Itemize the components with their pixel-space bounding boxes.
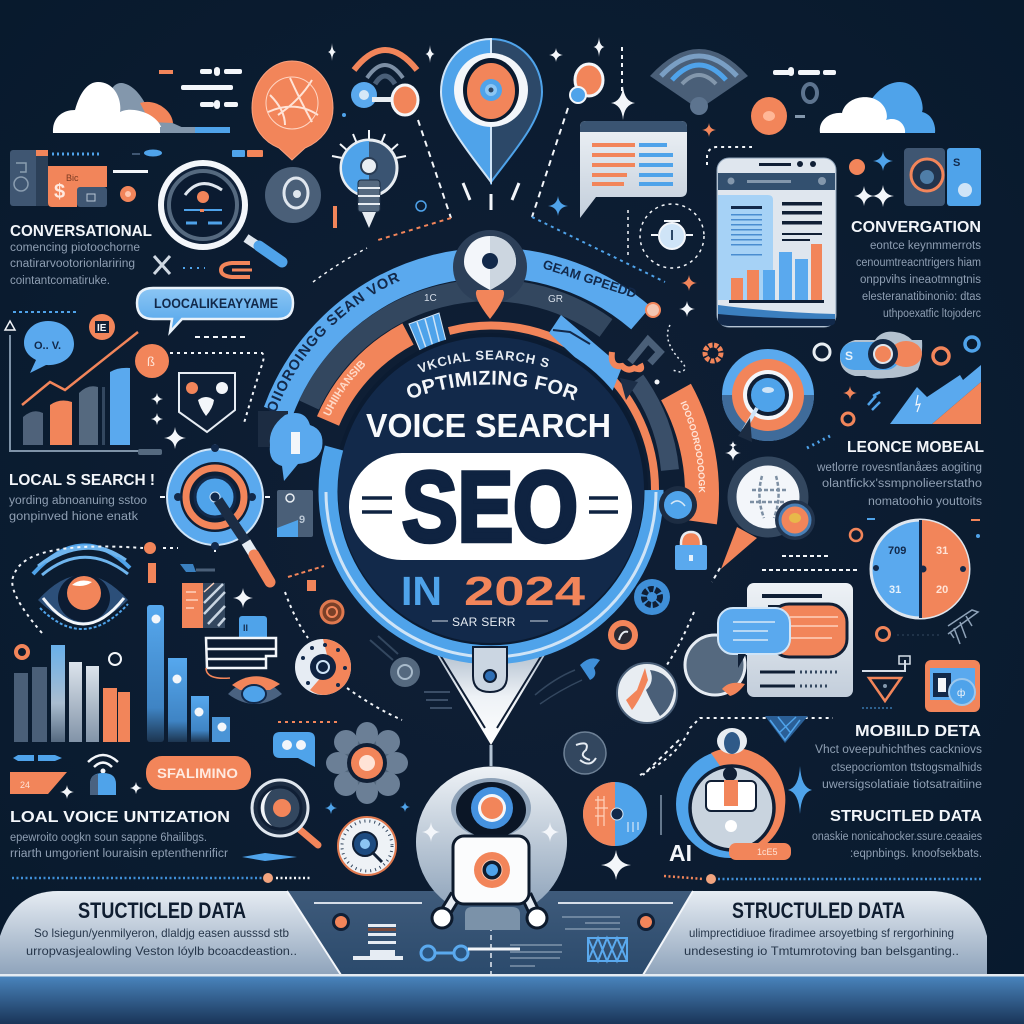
heading: convergation (851, 219, 981, 320)
panel: footer right: ulimprectidiuoe firadimee arsoyetbing sf rergorhining (689, 926, 954, 940)
panel: central pointer (419, 625, 563, 766)
ring text labels: GR (548, 294, 563, 305)
text: sar serr (432, 615, 548, 629)
icon: device card top left (10, 150, 263, 207)
icon: magnifying glass (161, 163, 282, 262)
icon: person with wifi (88, 755, 118, 795)
arc: blue ring (328, 448, 654, 655)
icon: top sparkles (328, 37, 635, 120)
arc: slate band (309, 290, 606, 405)
icon: target with pen (160, 444, 270, 582)
icons: right of ring marks (654, 275, 737, 449)
heading: leonce mobeal (816, 439, 984, 508)
icon: lock (675, 532, 707, 570)
icon: small magnifier (252, 780, 318, 845)
bubble: O.. V. (34, 340, 61, 352)
heading: local voice utilization: epewroito oogkn soun sappne 6hailibgs. (10, 832, 207, 844)
icon: left small row: 24 (20, 780, 30, 790)
icon: small squiggle circle (564, 732, 606, 774)
icon: half pie (583, 782, 647, 846)
panel: top arc bands (278, 263, 702, 522)
heading: leonce mobeal: wetlorre rovesntlanåæs aogiting (816, 462, 982, 474)
icon: right floating dashes and ball (751, 67, 836, 135)
icon: small blue sparkles and cog (342, 113, 716, 216)
icon: browser window with chart (717, 158, 836, 327)
heading: convergation: cenoumtreacntrigers hiam (856, 257, 981, 269)
icon: shield (179, 373, 235, 432)
text: in 2024: IN (401, 568, 442, 614)
panel: footer left (0, 891, 341, 975)
icon: grey circle with eye (265, 167, 321, 223)
text: in 2024: 2024 (464, 568, 585, 614)
icon: right node (637, 913, 655, 931)
icon: left sparkles (60, 185, 894, 880)
orange dot: ß (147, 354, 155, 369)
arc: slate band right (636, 380, 670, 470)
icon: rings and comb (850, 518, 980, 644)
footer band (0, 974, 1024, 1024)
icon: small grey square: 9 (299, 514, 305, 526)
icon: lined card with chip: ll (243, 623, 248, 633)
ring text labels: IOOGOOROOOOOGK (680, 400, 706, 493)
heading: conversational (10, 223, 152, 287)
icon: pill node cluster (814, 332, 979, 379)
ring text labels: IOIIOROINGG SEAN VOR (268, 272, 400, 411)
icon: top right card (849, 148, 981, 206)
icon: chain connector (421, 946, 520, 960)
icon: robot (416, 767, 567, 930)
heading: local search (9, 472, 155, 523)
icon: dotted stopwatch (640, 204, 704, 268)
icon: cloud bubble (258, 411, 322, 481)
icon: decorative small shapes under ring (370, 636, 600, 708)
heading: convergation: elesteranatibinonio: dtas (862, 291, 981, 303)
badge: IE (97, 323, 107, 334)
orange dot (135, 344, 169, 378)
heading: mobiild deta: MOBIILD DETA (855, 723, 981, 740)
heading: leonce mobeal: olantfickx'ssmpnolieerstatho (822, 478, 982, 490)
heading: convergation: eontce keynmmerrots (870, 240, 981, 252)
icon: small grey square (277, 490, 313, 537)
icon: bubble with two dots (273, 732, 315, 767)
panel: main badge circle (318, 337, 664, 693)
icon: small orange and blue capsule (570, 64, 603, 103)
pie chart: clock: 709 (888, 545, 906, 557)
arc: orange band left (328, 334, 408, 421)
connector: lower right dashed (640, 556, 858, 775)
text: optimizing for: OPTIMIZING FOR (407, 370, 578, 400)
panel: footer right: STRUCTULED DATA (732, 898, 905, 923)
icon: left cloud (53, 82, 230, 133)
icon: left small row (10, 755, 67, 794)
heading: convergation: CONVERGATION (851, 219, 981, 236)
icon: orange node (144, 542, 156, 554)
icon: eye (33, 545, 130, 629)
heading: conversational: CONVERSATIONAL (10, 223, 152, 240)
heading: mobiild deta: ctsepocriomton ttstogsmalhids (831, 762, 982, 774)
icon: pill node cluster: S (845, 349, 853, 363)
dividers: dotted lines (12, 873, 982, 884)
icon: signal arcs with nodes (351, 50, 418, 115)
heading: conversational: cointantcomatiruke. (10, 275, 110, 287)
icon: device card top left: $ (54, 181, 65, 203)
label: AI (661, 795, 692, 866)
icon: large location pin (441, 39, 542, 182)
pie chart: clock (871, 520, 969, 618)
heading: mobiild deta (815, 723, 982, 791)
icon: dial wheel (295, 639, 351, 695)
heading: mobiild deta: Vhct oveepuhichthes cackniovs (815, 744, 982, 756)
icon: right target (705, 345, 814, 442)
bar chart: grey and orange bars (14, 645, 130, 742)
icon: mountains chart (807, 365, 981, 448)
heading: mobiild deta: uwersigsolatiaie tiotsatraitiine (822, 779, 982, 791)
text: vkcial search: VKCIAL SEARCH S (417, 350, 549, 372)
icon: chain link (612, 340, 660, 370)
heading: convergation: uthpoexatfic ltojoderc (883, 308, 981, 320)
ring text labels: 1C (424, 293, 437, 304)
text: in 2024 (401, 568, 585, 614)
label pill: sfalimino: SFALIMINO (157, 765, 238, 781)
panel: footer right (643, 891, 987, 975)
ring text labels: UHIIHANSIB (323, 360, 365, 416)
icon: orange map bubble (252, 61, 333, 160)
icon: blue gear badge (608, 579, 670, 650)
icon: striped tile (409, 313, 447, 350)
bar chart: growth with trend line (5, 312, 169, 455)
arc: blue outer band (278, 263, 641, 412)
connectors: shield dotted path (170, 337, 264, 423)
icon: light bulb (332, 130, 406, 228)
heading: leonce mobeal: LEONCE MOBEAL (847, 439, 984, 456)
label pill: local keyword (137, 288, 293, 332)
icon: globe magnifier (721, 461, 815, 569)
heading: conversational: cnatirarvootorionlariring (10, 258, 135, 270)
connectors: top dashed lines (313, 47, 665, 282)
ring text labels (268, 257, 706, 493)
icon: orange and blue app tile: ф (957, 687, 965, 699)
label: AI: AI (669, 840, 692, 866)
icon: tiny blue sparkles (242, 802, 410, 861)
label pill: local keyword: LOOCALIKEAYYAME (154, 295, 278, 311)
heading: convergation: onppvihs ineaotmngtnis (860, 274, 981, 286)
badge (89, 314, 115, 340)
icon: browser speech panel (580, 121, 687, 218)
icon: lined card with chip (206, 616, 282, 704)
arc: orange banner right (676, 392, 702, 522)
icon: globe (617, 663, 677, 723)
heading: local search: yording abnoanuing sstoo (9, 495, 147, 507)
text: sar serr: SAR SERR (452, 615, 516, 629)
icon: dotted corner (707, 147, 752, 165)
heading: leonce mobeal: nomatoohio youttoits (868, 496, 982, 508)
heading: conversational: comencing piotoochorne (10, 242, 140, 254)
icon: cross and small orange mark (154, 256, 252, 277)
icon: small orange marker on arc (646, 303, 660, 317)
heading: local search: gonpinved hione enatk (9, 511, 138, 523)
panel: footer left: STUCTICLED DATA (78, 898, 246, 923)
icon: mesh triangle (765, 716, 808, 743)
ring text labels: GEAM GPEEDD (541, 257, 638, 301)
icon: avatar badge (676, 728, 812, 860)
heading: local search: LOCAL S SEARCH ! (9, 472, 155, 489)
heading: structiled data right: STRUCITLED DATA (830, 808, 982, 825)
icon: blue node on ring (659, 486, 697, 524)
heading: structiled data right (812, 808, 982, 860)
icon: avatar badge: 1cE5 (757, 847, 778, 857)
panel: footer right: undesesting io Tmtumrotoving ban belsganting.. (684, 944, 959, 958)
icon: blue card on arc (549, 315, 638, 400)
icon: flower gear (326, 722, 408, 804)
bar chart: blue bars (147, 563, 230, 742)
panel: footer left: So lsiegun/yenmilyeron, dlaldjg easen ausssd stb (34, 926, 289, 940)
arc: orange thin band (449, 326, 655, 490)
icon: triangle and small symbols (862, 656, 910, 708)
pie chart: clock: 31 (889, 584, 901, 596)
icon: dial magnifier (338, 817, 396, 875)
heading: structiled data right: :eqpnbings. knoofsekbats. (850, 848, 982, 860)
icon: server stack (353, 924, 403, 960)
icon: device card top left: Bic (66, 173, 79, 183)
icon: grey signal fan (650, 49, 748, 115)
pie chart: clock: 20 (936, 584, 948, 596)
icon: striped note card (182, 583, 225, 628)
heading: structiled data right: onaskie nonicahocker.ssure.ceaaies (812, 831, 982, 843)
icon: top right card: S (953, 157, 960, 169)
seo pill: SEO (402, 451, 578, 562)
panel: footer left: urropvasjealowling Veston lóylb bcoacdeastion.. (26, 944, 297, 958)
bubble (24, 321, 74, 373)
icon: chat card (685, 583, 853, 697)
icon: right cloud (820, 82, 935, 133)
icon: mesh (588, 938, 627, 961)
icon: orange swirl gear and marks (288, 566, 343, 623)
icon: pin rays (463, 183, 519, 210)
panel: footer middle (287, 891, 693, 975)
heading: local voice utilization: rriarth umgorient louraisin eptenthenrificr (10, 848, 228, 860)
icon: top ring pin (453, 230, 527, 319)
icon: orange and blue app tile (925, 660, 980, 712)
label pill: sfalimino (146, 756, 251, 790)
icon: left node (332, 913, 350, 931)
text: voice search: VOICE SEARCH (366, 407, 611, 444)
icon: left floating dashes (159, 67, 242, 109)
heading: local voice utilization: LOAL VOICE UNTIZATION (10, 809, 230, 826)
connector: eye dashed path (12, 547, 402, 722)
arc: white ring (326, 492, 656, 657)
heading: local voice utilization (10, 809, 230, 860)
pie chart: clock: 31 (936, 545, 948, 557)
tab: lower clasp (473, 647, 507, 692)
